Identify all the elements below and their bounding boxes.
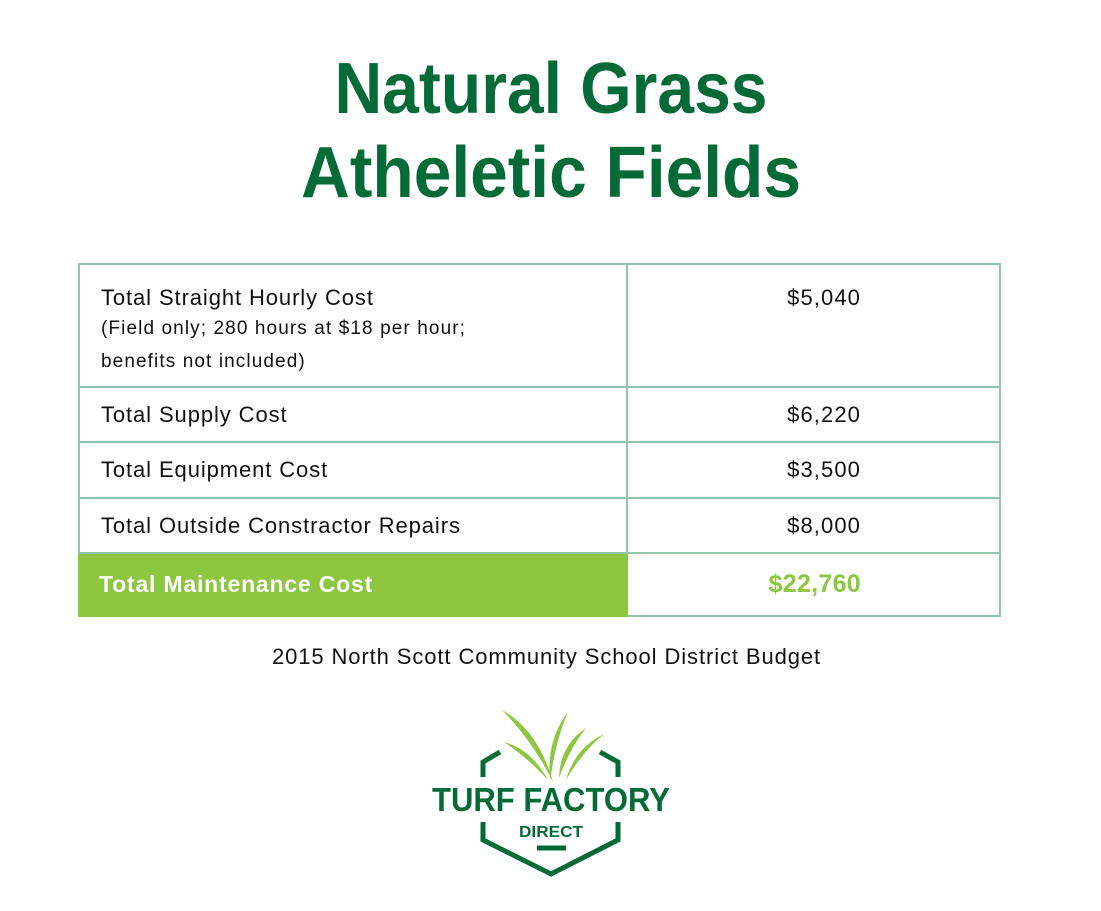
title: Natural Grass — [334, 49, 768, 129]
title — [301, 49, 801, 213]
cost table: Total Maintenance Cost — [99, 571, 373, 597]
cost table: Total Equipment Cost — [101, 457, 328, 482]
logo — [432, 710, 670, 877]
cost table: Total Outside Constractor Repairs — [101, 512, 461, 538]
logo text: TURF FACTORY — [432, 781, 670, 818]
cost table: $5,040 — [787, 285, 861, 310]
cost table: $3,500 — [787, 457, 861, 482]
logo: DIRECT — [519, 824, 583, 841]
cost table — [78, 263, 1001, 617]
icon: grass blades — [502, 710, 604, 782]
title: Atheletic Fields — [301, 133, 801, 213]
cost table: benefits not included) — [101, 351, 306, 372]
cost table: $22,760 — [769, 570, 861, 598]
cost table: Total Supply Cost — [101, 402, 288, 426]
cost table: (Field only; 280 hours at $18 per hour; — [101, 318, 466, 339]
cost table: $8,000 — [787, 512, 861, 538]
cost table: Total Straight Hourly Cost — [101, 285, 374, 310]
caption: 2015 North Scott Community School District Budget — [272, 644, 821, 669]
hexagon frame — [483, 752, 618, 874]
cost table: $6,220 — [787, 402, 861, 426]
